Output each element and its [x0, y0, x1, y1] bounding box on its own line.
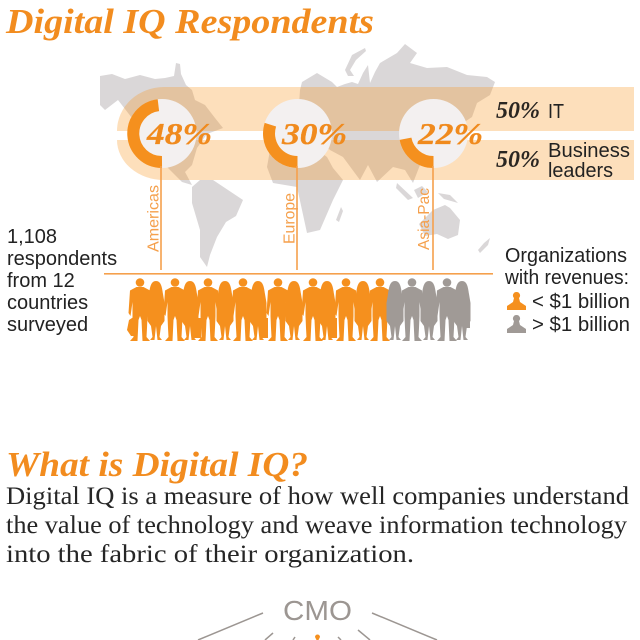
band: business leaders — [117, 140, 634, 180]
definition text: the value of technology and weave information technology — [6, 510, 627, 539]
map: Scandinavia — [345, 48, 366, 76]
respondents text: respondents — [7, 248, 117, 270]
donut: Europe 30%: 30% — [281, 116, 347, 151]
donut: Americas 48% — [128, 99, 212, 270]
respondent split: 50% IT: 50% — [496, 98, 540, 124]
respondents text: countries — [7, 292, 88, 314]
donut: Americas 48%: 48% — [146, 116, 212, 151]
respondents text — [7, 226, 117, 336]
band: IT — [117, 87, 634, 131]
diagram: CMO label: CMO — [283, 595, 352, 626]
respondents text: 1,108 — [7, 226, 57, 248]
map: South America — [192, 180, 243, 267]
legend: organizations with revenues: < $1 billion — [532, 291, 630, 313]
map: Australia — [419, 205, 460, 239]
donut: Asia-Pac 22% — [399, 99, 483, 270]
respondents text: from 12 — [7, 270, 75, 292]
respondent split: 50% business leaders: 50% — [496, 147, 540, 173]
label: Americas: Americas — [146, 185, 162, 252]
people silhouettes: over $1 billion — [386, 278, 470, 341]
world map — [100, 44, 495, 267]
label: Europe: Europe — [282, 193, 298, 244]
definition text — [6, 481, 629, 568]
icon: orange person — [507, 292, 526, 310]
legend: organizations with revenues: > $1 billion — [532, 314, 630, 336]
diagram: connector lines — [198, 613, 437, 640]
title: Digital IQ Respondents — [5, 2, 374, 41]
map: Madagascar — [336, 207, 343, 222]
donut: Asia-Pac 22%: 22% — [417, 116, 483, 151]
respondents text: surveyed — [7, 314, 88, 336]
definition text: into the fabric of their organization. — [6, 539, 414, 568]
heading: What is Digital IQ?: What is Digital IQ? — [6, 445, 308, 484]
respondent split: 50% business leaders — [496, 140, 630, 182]
map: Southeast Asia islands — [396, 183, 458, 203]
map: North America — [100, 63, 223, 185]
respondent split: 50% business leaders: leaders — [548, 160, 613, 182]
map: Europe and Asia — [298, 44, 495, 183]
legend: organizations with revenues: Organizations — [505, 245, 627, 267]
donut: Europe 30% — [263, 99, 347, 270]
label: Asia-Pac: Asia-Pac — [416, 188, 433, 250]
diagram: orange dot — [315, 634, 320, 640]
respondent split: 50% business leaders: Business — [548, 140, 630, 162]
people silhouettes: under $1 billion — [127, 278, 392, 341]
baseline rule — [104, 273, 493, 275]
legend: organizations with revenues: with revenues: — [504, 267, 629, 289]
map: New Zealand — [478, 238, 490, 253]
definition text: Digital IQ is a measure of how well companies understand — [6, 481, 629, 510]
respondent split: 50% IT — [496, 98, 564, 124]
legend: organizations with revenues — [504, 245, 630, 336]
map: Africa — [267, 134, 343, 233]
icon: grey person — [507, 315, 526, 333]
bands: IT and business leaders — [117, 87, 634, 180]
respondent split: 50% IT: IT — [548, 101, 564, 123]
